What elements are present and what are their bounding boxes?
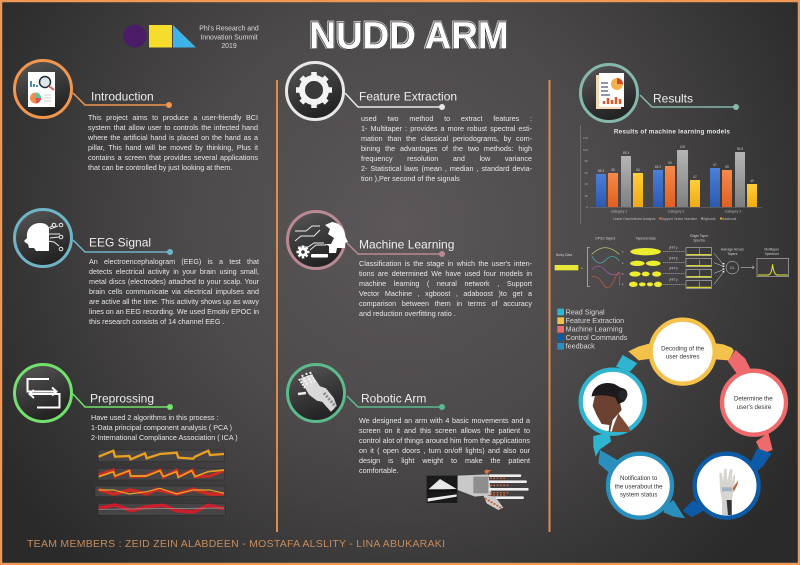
label: single taper spectra: Spectra [693,239,705,243]
icon: report with magnifier [14,60,72,118]
diagram: multitaper spectrum process: × [622,250,624,254]
heading: Results [653,92,693,106]
connector line [347,396,445,410]
text block: on it ( open doors , turn on/off lights) and also our [359,446,530,455]
FFT labels and dotted lines: |FFT|² [669,246,679,250]
node: determine: user's desire [737,404,772,411]
bar chart: results of machine learning models: 40 [585,182,588,186]
text block: metal discs (electrodes) attached to your scalp. Your [89,277,259,286]
node: user photo [581,370,645,434]
average symbol [723,261,739,274]
icon: robot hand [288,364,344,422]
text block: pillar, This hand will be moved by thinking, Plus it [88,143,258,152]
bar chart: results of machine learning models: 67 [713,163,717,167]
FFT labels and dotted lines: |FFT|² [669,257,679,261]
bar chart: results of machine learning models: Adaboost [722,217,736,221]
bar chart: results of machine learning models [580,125,762,224]
team members: TEAM MEMBERS : ZEID ZEIN ALABDEEN - MOSTAFA ALSLITY - LINA ABUKARAKI [27,538,445,550]
bar chart: results of machine learning models: 120 [583,136,588,140]
bar chart: results of machine learning models: 95.5 [737,147,743,151]
icon: report with charts [580,64,638,122]
bar chart: results of machine learning models: Xgboost [703,217,715,221]
bar chart: results of machine learning models: Category 1 [611,210,627,214]
label: tapered data: Tapered Data [636,236,656,240]
icon: gear [286,62,344,120]
heading: Introduction [91,90,154,104]
bar chart: results of machine learning models: 65.3 [655,165,661,169]
text block: Vector Machine , xgboost , adaboost )to get a [359,289,532,298]
text block [359,416,530,478]
logo shape: yellow square [149,25,172,48]
text block: lines on an EEG recording. We used Emotiv EPOC in [89,307,259,316]
node: decoding: Decoding of the [661,345,705,352]
arrow to spectrum [741,266,754,269]
legend: Control Commands [566,334,628,342]
text block: brain cells communicate via electrical impulses and [89,287,259,296]
label: average across tapers: Tapers [727,252,738,256]
diagram: multitaper spectrum process: × [622,261,624,265]
heading: Preprossing [90,392,154,406]
node: determine: Determine the [734,396,773,403]
text block [361,114,532,186]
text block: comfortable. [359,466,399,475]
text block: This project aims to produce a user-friendly BCI [88,113,258,122]
label: noisy data: Noisy Data [556,253,572,257]
legend: Read Signal [566,308,605,316]
bar chart: results of machine learning models: 47 [693,175,697,179]
column divider left [276,80,278,532]
text block: 2-International Compliance Association ( ICA ) [91,433,238,442]
bar chart: results of machine learning models: 20 [585,194,588,198]
text block: and reduction overfitting ratio . [359,309,456,318]
text block: detects electrical activity in your brain using small, [89,267,259,276]
label: average across tapers: Average Across [721,247,744,251]
bar chart: results of machine learning models: Support Vector Machine [661,217,697,221]
heading: Feature Extraction [359,90,457,104]
node: notification: system status [620,492,657,499]
connector line [347,243,445,257]
panel: results [580,64,762,224]
text block: 1-Data principal component analysis ( PCA ) [91,423,232,432]
connector line [73,394,173,410]
diagram: multitaper spectrum process: × [581,266,583,270]
text block: Classification is the stage in which the user's inten- [359,259,532,268]
chart: filtered signal plots [95,450,225,515]
arrows into average [714,253,723,284]
node: determine [722,371,786,435]
text block: tion ),Per second of the signals [361,174,460,183]
legend: Machine Learning [566,326,623,334]
label: single taper spectra: Single Taper [690,234,709,238]
text block: 2- Statistical laws (mean , median , standard devia- [361,164,532,173]
text block [89,257,259,329]
logo text: Phi's Research and [199,26,259,32]
bar chart: results of machine learning models: 60 [636,168,640,172]
text block: that can be controlled by just looking at them. [88,163,232,172]
bar chart: results of machine learning models: 100 [680,145,685,149]
text block: frequency resolution and low variance [361,154,532,163]
panel: introduction [14,60,258,175]
bar chart: results of machine learning models: 69 [668,161,672,165]
text block: tions are determined We have used four models in [359,269,532,278]
node: notification [608,454,672,518]
text block: machine learning ( neural network , Support [359,279,532,288]
bar chart: results of machine learning models: 40 [750,179,754,183]
logo text: Innovation Summit [200,34,258,42]
panel: preprocessing [14,364,261,515]
connector line [640,95,739,110]
diagram: multitaper spectrum process: × [622,283,624,287]
heading: EEG Signal [89,236,151,250]
FFT labels and dotted lines: |FFT|² [669,267,679,271]
diagram: multitaper spectrum process [555,234,789,288]
legend: feedback [566,343,595,351]
connector line [73,240,173,255]
panel: EEG signal [14,210,259,329]
node: decoding [651,320,715,384]
average symbol: Σ/L [730,266,735,270]
image: person with EEG headset [592,383,631,432]
text block: screen on it and this screen allows the patient to [359,426,530,435]
bar chart: results of machine learning models: Category 2 [668,210,684,214]
legend: Feature Extraction [566,317,624,325]
node: notification: Notification to [620,475,658,482]
panel: robotic arm [288,364,530,510]
label: multitaper spectrum: Spectrum [765,252,779,256]
title: NUDD ARM [310,16,508,58]
text block: 1- Multitaper : provides a more robust spectral esti- [361,124,532,133]
text block: bining the advantages of the two methods: high [361,144,532,153]
heading: Machine Learning [359,238,454,252]
text block: mation than the classical periodograms, by com- [361,134,532,143]
text block [88,113,258,175]
bar chart: results of machine learning models: 0 [586,205,588,209]
text block: design is light weight to make the patient [359,456,530,465]
bar chart: results of machine learning models: 60 [585,171,588,175]
label: tapers: DPSS Tapers [595,236,616,240]
multitaper spectrum plot [757,258,789,277]
text block: where the artificial hand is placed on the hand as a [88,133,258,142]
legend [557,308,628,351]
text block: this research consists of 14 channel EEG . [89,317,224,326]
text block: control alot of things around him from the applications [359,436,530,445]
connector line [73,93,172,108]
text block: We designed an arm with 4 basic movements and a [359,416,530,425]
icon: swap arrows [14,364,72,422]
bar chart: results of machine learning models: Category 3 [725,210,741,214]
node: arm photo [695,454,759,518]
text block: comparison between them in terms of accuracy [359,299,532,308]
tapered signals [629,248,662,287]
image: prosthetic arm [427,470,527,510]
bar chart: results of machine learning models: 65 [725,165,729,169]
logo text: 2019 [221,43,237,50]
logo shape: blue triangle [173,25,196,48]
column divider right [548,80,550,532]
connector line [345,93,445,110]
panel: BCI cycle [557,308,786,518]
taper curves [592,248,620,288]
label: multitaper spectrum: Multitaper [764,247,780,251]
spectra boxes [686,248,712,288]
bar chart: results of machine learning models: 58.3 [598,169,604,173]
bar chart: results of machine learning models: Linear Discriminant Analysis [613,217,656,221]
text block: system that allow user to controls the infected hand [88,123,258,132]
bar chart: results of machine learning models: 89.3 [623,151,629,155]
heading: Robotic Arm [361,392,426,406]
text block: are active all the time. This activity shows up as wavy [89,297,259,306]
summit logo [124,24,259,50]
text block [359,259,532,321]
FFT labels and dotted lines [663,246,685,284]
text block: contains a screen that provides several applications [88,153,258,162]
text block: Have used 2 algorithms in this process : [91,413,218,422]
cycle arrows [593,343,773,518]
text block [91,413,261,445]
panel: feature extraction [286,62,532,186]
panel: machine learning [288,212,532,321]
text block: used two method to extract features : [361,114,532,123]
icon: AI head with gear [288,212,348,268]
FFT labels and dotted lines: |FFT|² [669,278,679,282]
bar chart: results of machine learning models: 100 [583,148,588,152]
logo shape: purple circle [124,24,146,48]
text block: An electroencephalogram (EEG) is a test that [89,257,259,266]
image: glove hand [719,469,738,515]
noisy signal [555,265,578,270]
node: decoding: user desires [666,354,699,361]
icon: head with electrodes [14,210,72,266]
chart title: Results of machine learning models [614,128,730,136]
diagram: multitaper spectrum process: × [622,272,624,276]
bar chart: results of machine learning models: 80 [585,159,588,163]
node: notification: the userabout the [615,483,663,490]
bar chart: results of machine learning models: 59 [611,168,615,172]
